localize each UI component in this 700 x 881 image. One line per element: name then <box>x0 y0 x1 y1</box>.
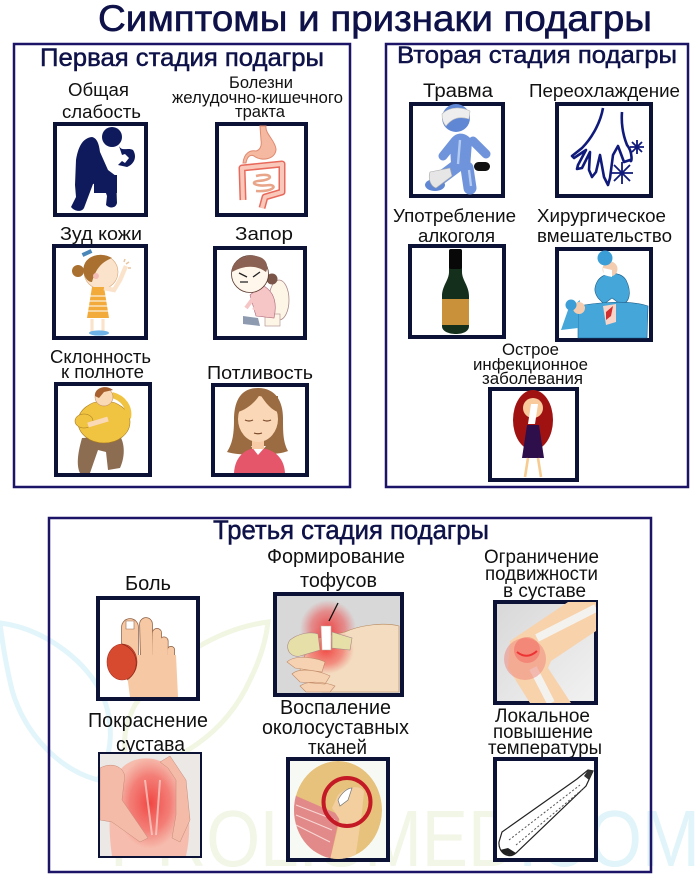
item: trauma <box>411 81 503 196</box>
item: local temperature rise <box>488 706 602 860</box>
panel: second stage <box>386 42 688 487</box>
item: trauma: Травма <box>423 81 493 102</box>
item: itchy skin: Зуд кожи <box>60 224 142 244</box>
heading: first stage: Первая стадия подагры <box>40 44 324 72</box>
item: sweating: Потливость <box>207 362 313 383</box>
item: acute infection: Острое <box>502 341 559 359</box>
item: alcohol <box>393 206 516 337</box>
item: tendency to obesity: к полноте <box>61 362 144 382</box>
item: pain <box>98 573 198 699</box>
watermark: PROLISMED <box>110 794 518 881</box>
item: limited mobility <box>484 547 599 703</box>
item: itchy skin <box>54 224 146 338</box>
item: joint redness <box>88 710 208 856</box>
heading: second stage: Вторая стадия подагры <box>397 42 677 69</box>
item: constipation: Запор <box>235 224 293 244</box>
item: sweating <box>207 362 313 475</box>
item: GI disease: желудочно-кишечного <box>172 89 343 107</box>
item: general weakness: слабость <box>62 102 141 122</box>
item: general weakness: Общая <box>68 80 129 100</box>
item: GI disease: Болезни <box>229 74 293 92</box>
item: limited mobility: подвижности <box>485 564 598 585</box>
item: surgery <box>537 206 672 340</box>
item: local temperature rise: Локальное <box>495 706 590 727</box>
item: periarticular inflammation: Воспаление <box>280 697 391 719</box>
item: hypothermia: Переохлаждение <box>529 81 680 101</box>
watermark <box>0 622 700 881</box>
panel: first stage <box>14 44 350 487</box>
item: GI disease: тракта <box>235 103 286 121</box>
item: acute infection: заболевания <box>482 370 583 388</box>
item: constipation <box>215 224 305 338</box>
item: joint redness: Покраснение <box>88 710 208 732</box>
item: surgery: вмешательство <box>537 226 672 246</box>
item: GI disease <box>172 74 343 215</box>
item: alcohol: алкоголя <box>418 226 495 246</box>
item: local temperature rise: температуры <box>488 738 602 759</box>
item: hypothermia <box>529 81 680 196</box>
item: tophi: Формирование <box>267 546 405 568</box>
item: general weakness <box>55 80 146 215</box>
item: acute infection <box>473 341 588 480</box>
item: surgery: Хирургическое <box>537 206 666 226</box>
item: periarticular inflammation: тканей <box>308 737 367 759</box>
item: pain: Боль <box>125 573 171 595</box>
heading: third stage: Третья стадия подагры <box>213 515 489 545</box>
item: tophi <box>267 546 405 695</box>
panel: third stage <box>49 515 651 872</box>
item: limited mobility: Ограничение <box>484 547 599 568</box>
item: tendency to obesity <box>50 347 151 475</box>
item: tophi: тофусов <box>300 570 377 592</box>
item: alcohol: Употребление <box>393 206 516 226</box>
item: acute infection: инфекционное <box>473 356 588 374</box>
item: joint redness: сустава <box>116 734 186 756</box>
item: tendency to obesity: Склонность <box>50 347 151 367</box>
item: limited mobility: в суставе <box>503 581 586 602</box>
item: periarticular inflammation: околосуставных <box>262 717 409 739</box>
item: local temperature rise: повышение <box>493 722 593 743</box>
item: periarticular inflammation <box>262 697 409 860</box>
